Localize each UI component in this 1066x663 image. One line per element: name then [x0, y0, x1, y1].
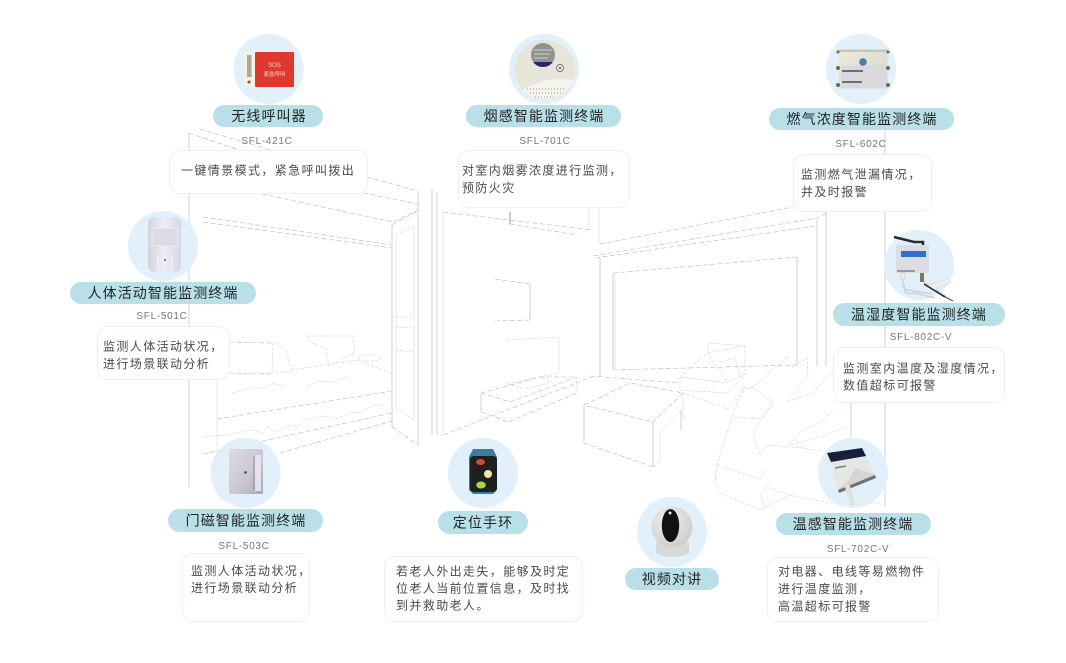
device: temperature and humidity sensor — [833, 230, 1005, 402]
icon: camera — [637, 497, 707, 567]
model number: SFL-503C — [218, 541, 270, 552]
icon: SOS call button: SOS — [268, 63, 281, 69]
card: wireless call button description — [170, 150, 368, 194]
card: locator bracelet description: 若老人外出走失，能够及时定 — [396, 564, 570, 578]
icon: locator bracelet — [448, 438, 518, 508]
label: wireless call button name: 无线呼叫器 — [231, 108, 307, 124]
label: door sensor name — [168, 509, 323, 532]
icon: temperature humidity sensor — [884, 230, 954, 301]
card: temperature humidity description: 数值超标可报警 — [843, 378, 937, 392]
model number: SFL-701C — [519, 136, 571, 147]
label: temperature humidity sensor name: 温湿度智能监测终端 — [851, 306, 987, 322]
label: temperature humidity sensor name — [833, 303, 1005, 326]
model number: SFL-702C-V — [827, 544, 889, 555]
card: smoke sensor description: 对室内烟雾浓度进行监测， — [462, 162, 623, 178]
label: human activity sensor name — [70, 282, 256, 304]
icon: door magnet sensor — [210, 438, 280, 508]
model number: SFL-802C-V — [890, 332, 952, 343]
label: gas sensor name: 燃气浓度智能监测终端 — [786, 111, 938, 127]
label: wireless call button name — [213, 105, 323, 127]
label: temperature sensing name — [776, 513, 931, 535]
card: locator bracelet description: 位老人当前位置信息，及时找 — [396, 580, 570, 596]
label: video intercom name: 视频对讲 — [642, 571, 702, 587]
card: human activity description — [98, 326, 230, 380]
model number: SFL-421C — [241, 136, 293, 147]
card: temperature humidity description: 监测室内温度及湿度情况， — [843, 360, 1004, 376]
room line drawing background — [189, 129, 885, 510]
label: human activity sensor name: 人体活动智能监测终端 — [88, 285, 238, 301]
card: door sensor description: 进行场景联动分析 — [191, 581, 298, 595]
device: human activity sensor — [70, 211, 256, 380]
card: gas sensor description: 并及时报警 — [801, 184, 868, 199]
model number: SFL-501C — [136, 311, 188, 322]
card: door sensor description: 监测人体活动状况， — [191, 564, 312, 578]
device: temperature sensing terminal — [768, 438, 938, 622]
card: temperature humidity description — [834, 348, 1004, 402]
label: gas sensor name — [769, 108, 954, 130]
card: gas sensor description: 监测燃气泄漏情况， — [801, 166, 922, 182]
device: locator bracelet — [384, 438, 582, 622]
icon: temperature sensing box — [818, 438, 888, 508]
card: temperature sensing description: 高温超标可报警 — [778, 598, 872, 614]
icon: SOS call button: 紧急呼叫 — [263, 70, 286, 78]
card: temperature sensing description — [768, 558, 938, 622]
card: locator bracelet description: 到并救助老人。 — [396, 598, 490, 612]
card: temperature sensing description: 进行温度监测， — [778, 581, 872, 596]
card: wireless call button description: 一键情景模式，紧急呼叫拨出 — [181, 162, 355, 178]
icon: SOS call button — [234, 34, 304, 104]
card: gas sensor description — [794, 154, 932, 212]
icon: smoke detector — [509, 34, 579, 104]
model number: SFL-602C — [835, 139, 887, 150]
label: smoke sensor name — [466, 105, 621, 127]
device: smoke sensor — [458, 34, 630, 208]
card: smoke sensor description — [458, 150, 630, 208]
card: door sensor description — [182, 554, 312, 622]
card: human activity description: 进行场景联动分析 — [103, 357, 210, 371]
device: wireless call button — [170, 34, 368, 194]
card: temperature sensing description: 对电器、电线等易燃物件 — [778, 564, 925, 578]
card: human activity description: 监测人体活动状况， — [103, 340, 224, 354]
device: gas sensor — [769, 34, 954, 212]
label: locator bracelet name: 定位手环 — [453, 514, 513, 530]
icon: gas sensor box — [826, 34, 896, 104]
label: door sensor name: 门磁智能监测终端 — [186, 512, 306, 528]
device: door sensor — [168, 438, 323, 622]
label: smoke sensor name: 烟感智能监测终端 — [484, 108, 604, 124]
icon: PIR motion sensor — [128, 211, 198, 281]
card: smoke sensor description: 预防火灾 — [462, 180, 516, 195]
card: locator bracelet description — [384, 556, 582, 622]
label: locator bracelet name — [438, 511, 528, 534]
label: temperature sensing name: 温感智能监测终端 — [793, 516, 913, 532]
device: video intercom camera — [625, 497, 719, 590]
